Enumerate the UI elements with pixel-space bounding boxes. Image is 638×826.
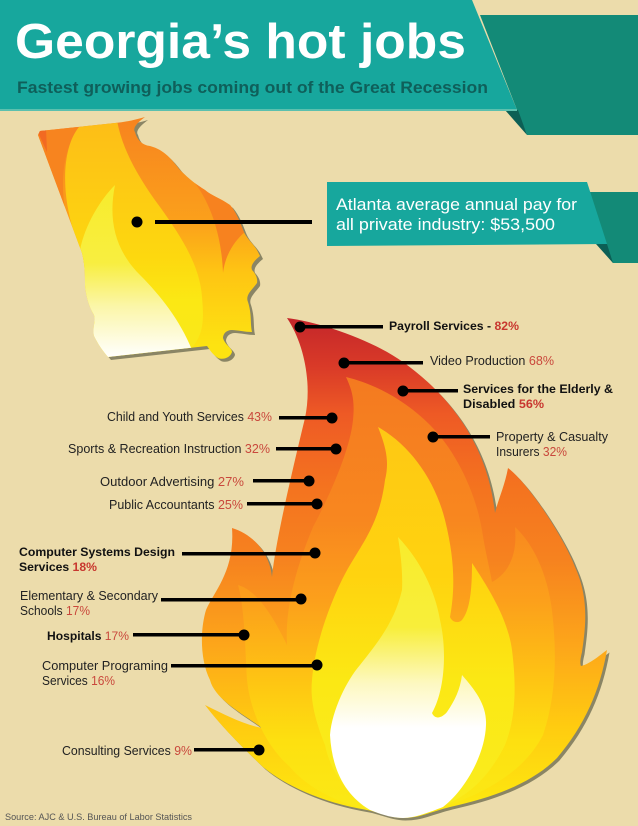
label: Computer Programing Services: Services 16%: [42, 674, 115, 688]
label: Payroll Services: [294, 319, 519, 333]
subtitle: Fastest growing jobs coming out of the Great Recession: [17, 78, 488, 97]
label: Computer Systems Design Services: [19, 545, 320, 574]
Georgia map filled with flames: [30, 110, 270, 365]
label: Services for the Elderly and Disabled: [398, 382, 613, 411]
callout: Atlanta average pay: Atlanta average annual pay for: [336, 195, 577, 214]
label: Consulting Services: Consulting Services 9%: [62, 744, 192, 758]
label: Computer Systems Design Services: Computer Systems Design: [19, 545, 175, 559]
label: Elementary and Secondary Schools: Elementary & Secondary: [20, 589, 159, 603]
label: Outdoor Advertising: Outdoor Advertising 27%: [100, 475, 244, 489]
label: Elementary and Secondary Schools: [20, 589, 306, 618]
label: Child and Youth Services: Child and Youth Services 43%: [107, 410, 272, 424]
label: Video Production: Video Production 68%: [430, 354, 554, 368]
label: Computer Programing Services: Computer Programing: [42, 659, 168, 673]
label: Consulting Services: [62, 744, 264, 758]
label: Services for the Elderly and Disabled: Services for the Elderly &: [463, 382, 613, 396]
label: Computer Programing Services: [42, 659, 322, 688]
callout: Atlanta average pay: all private industry: $53,500: [336, 215, 555, 234]
label: Outdoor Advertising: [100, 475, 314, 489]
label: Hospitals: Hospitals 17%: [47, 629, 129, 643]
label: Elementary and Secondary Schools: Schools 17%: [20, 604, 90, 618]
label: Computer Systems Design Services: Services 18%: [19, 560, 97, 574]
source note: Source: AJC & U.S. Bureau of Labor Statistics: [5, 812, 192, 823]
label: Services for the Elderly and Disabled: Disabled 56%: [463, 397, 544, 411]
label: Payroll Services: Payroll Services - 82%: [389, 319, 519, 333]
label: Public Accountants: Public Accountants 25%: [109, 498, 243, 512]
callout: Atlanta average pay: [327, 182, 638, 263]
label: Sports and Recreation Instruction: Sports & Recreation Instruction 32%: [68, 442, 270, 456]
pointer: Georgia: [132, 216, 312, 228]
title: Georgia’s hot jobs: [15, 15, 466, 69]
label: Video Production: [338, 354, 554, 368]
label: Property and Casualty Insurers: Property & Casualty: [496, 430, 609, 444]
label: Property and Casualty Insurers: Insurers 32%: [496, 445, 567, 459]
label: Hospitals: [47, 629, 250, 643]
label: Public Accountants: [109, 498, 322, 512]
label: Property and Casualty Insurers: [428, 430, 609, 459]
header ribbon: [0, 0, 638, 135]
large flame: [202, 318, 610, 820]
